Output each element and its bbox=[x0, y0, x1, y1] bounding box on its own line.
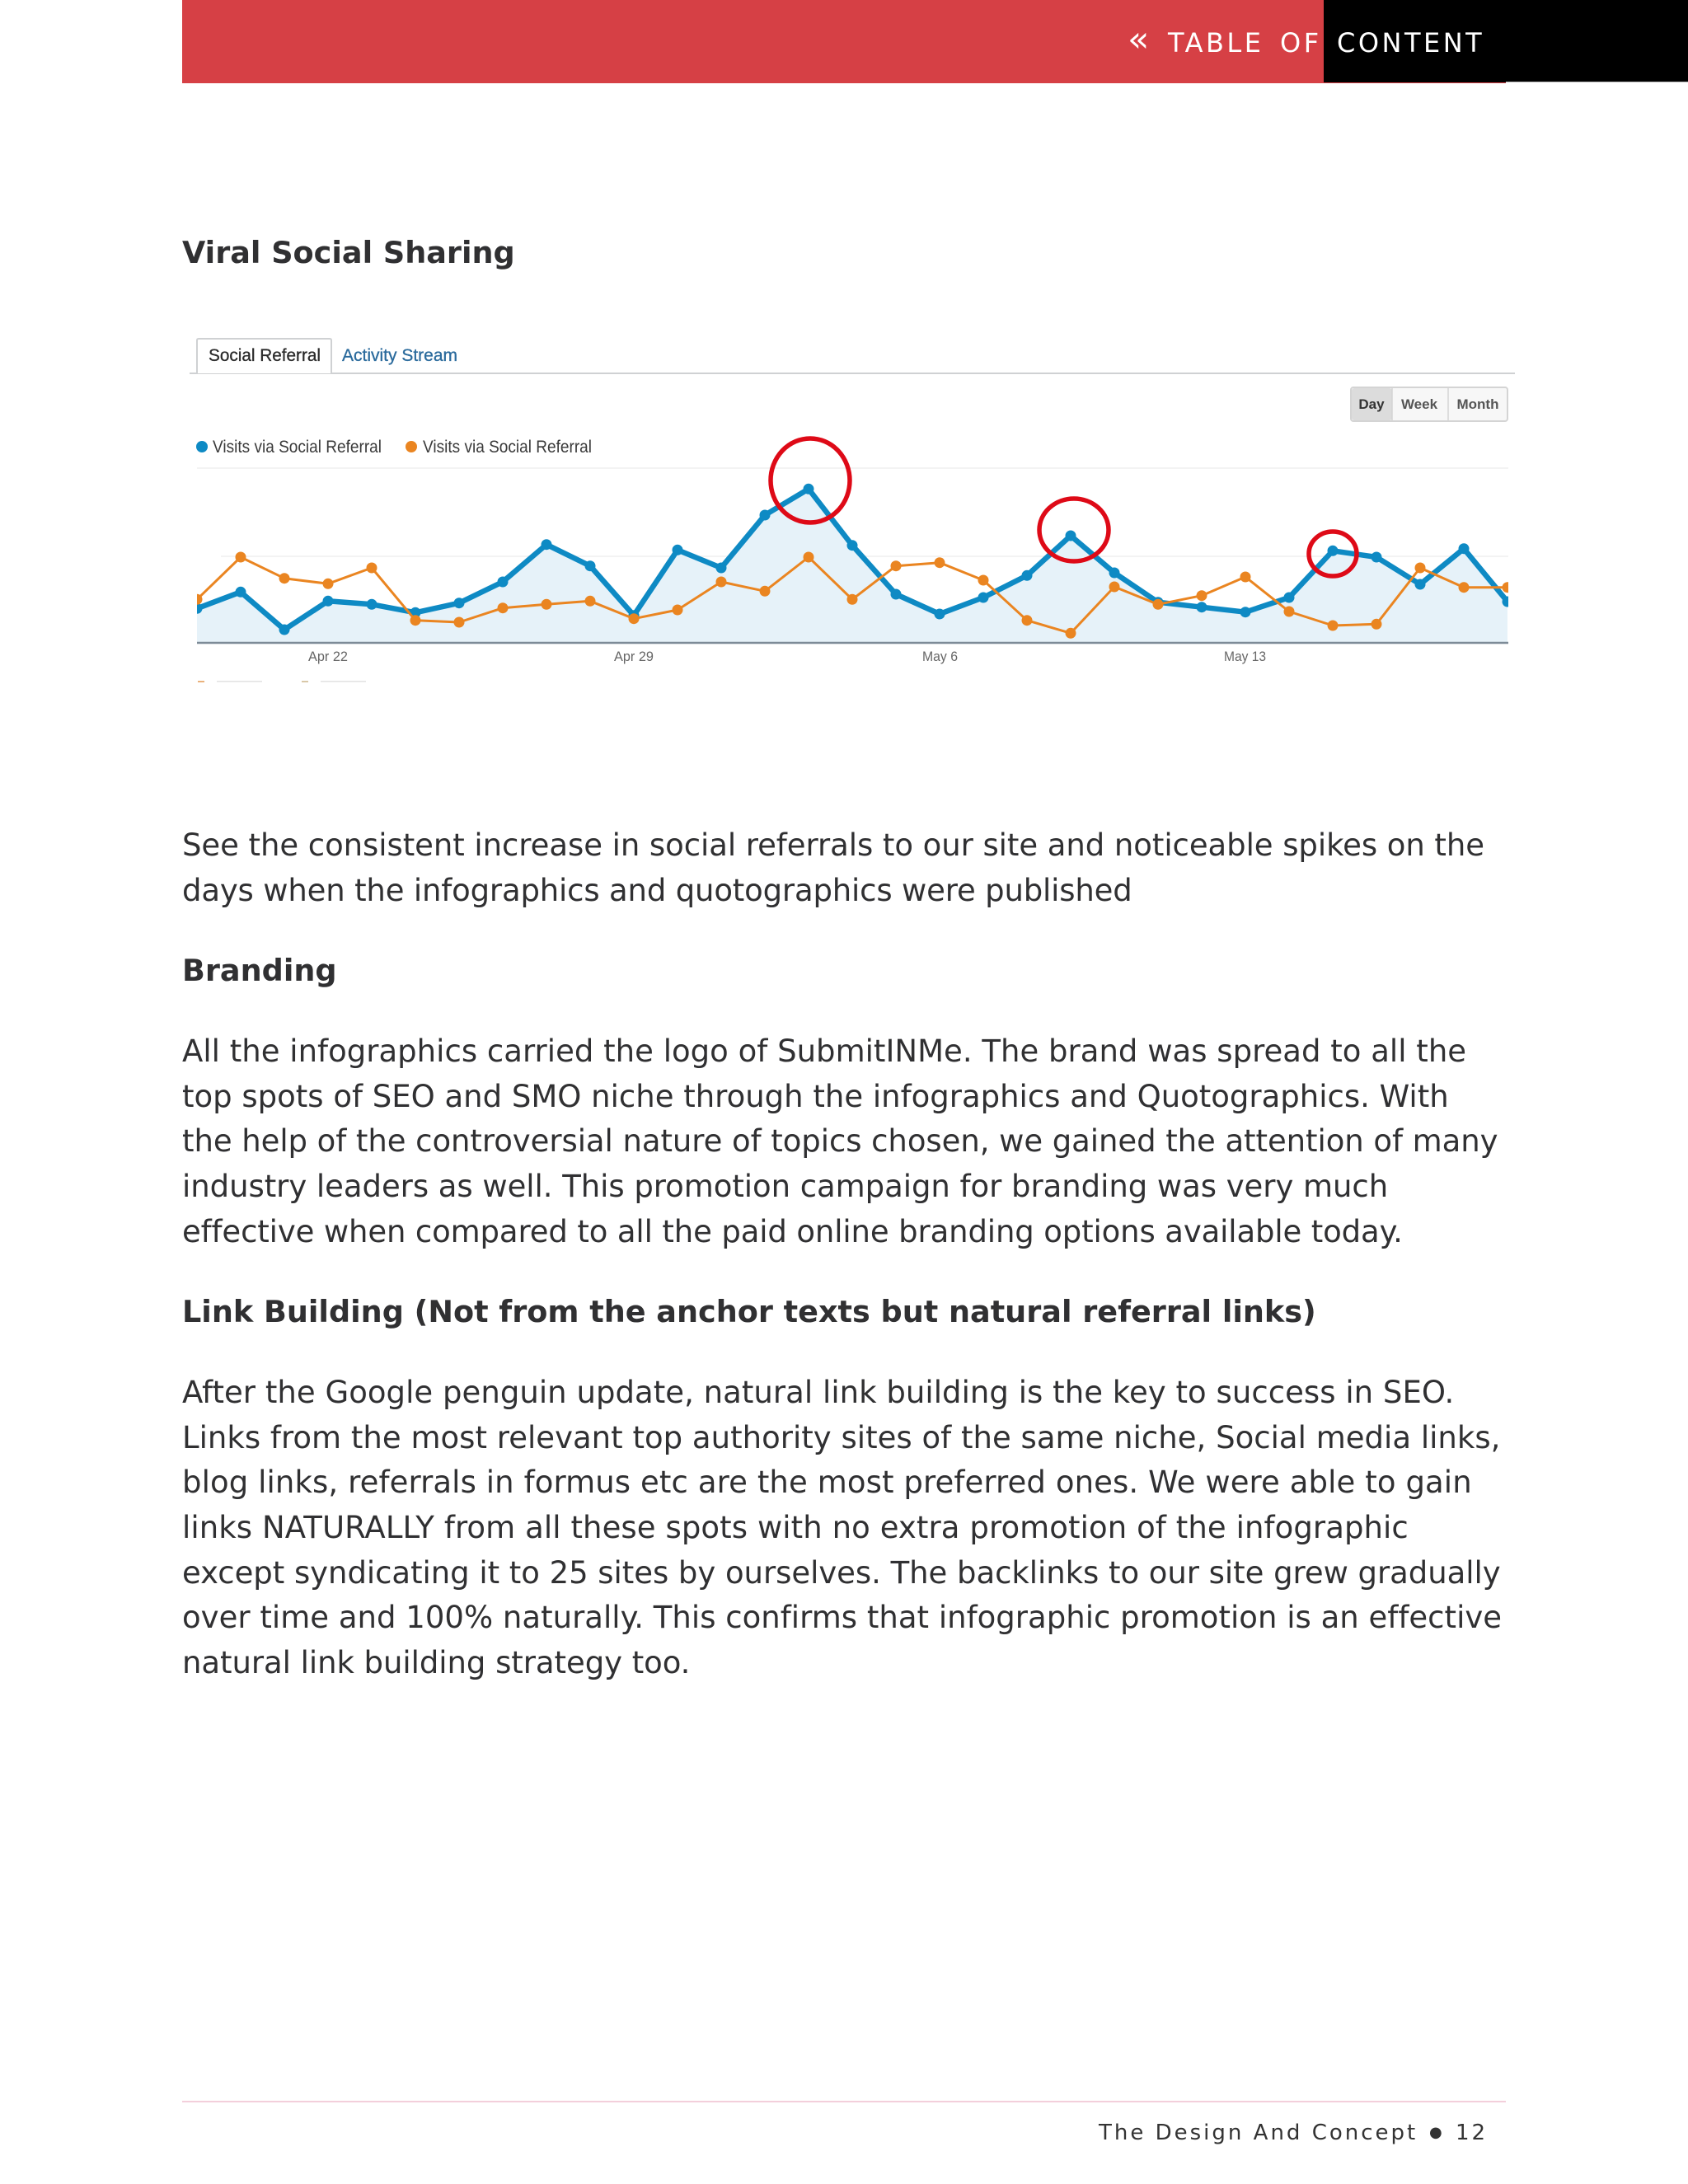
paragraph: social referrals: days when the infographics and quotographics were published bbox=[182, 873, 1132, 908]
red band bbox=[182, 0, 1506, 83]
series: orange bbox=[191, 552, 1513, 639]
x axis labels: Apr 29 bbox=[614, 649, 654, 664]
x axis labels: May 6 bbox=[922, 649, 958, 664]
gridlines bbox=[197, 468, 1508, 556]
paragraph: branding bbox=[182, 1033, 1498, 1249]
cropped lower legend bbox=[198, 681, 366, 682]
footer rule bbox=[182, 2101, 1506, 2102]
range buttons bbox=[1351, 387, 1507, 421]
table of content link: CONTENT bbox=[1337, 27, 1484, 59]
header bar bbox=[182, 0, 1688, 83]
tab: Social Referral bbox=[197, 339, 331, 373]
table of content link: « bbox=[1128, 19, 1152, 60]
black extension bbox=[1506, 0, 1688, 82]
footer text: ● bbox=[1429, 2124, 1442, 2141]
heading: Branding: Branding bbox=[182, 953, 337, 988]
paragraph: social referrals: See the consistent increase in social referrals to our site and noticeable spikes on the bbox=[182, 827, 1484, 863]
table of content link: TABLE bbox=[1168, 27, 1264, 59]
paragraph: link building: over time and 100% naturally. This confirms that infographic promotion is an effective bbox=[182, 1600, 1502, 1635]
tab bar bbox=[190, 339, 1515, 373]
paragraph: link building: blog links, referrals in formus etc are the most preferred ones. We were able to gain bbox=[182, 1465, 1472, 1500]
range buttons: Month bbox=[1457, 396, 1498, 412]
paragraph: link building: except syndicating it to 25 sites by ourselves. The backlinks to our site grew gradually bbox=[182, 1555, 1501, 1591]
black block bbox=[1324, 0, 1688, 82]
range buttons: Week bbox=[1401, 396, 1438, 412]
paragraph: branding: the help of the controversial nature of topics chosen, we gained the attention of many bbox=[182, 1123, 1498, 1159]
footer text: 12 bbox=[1456, 2121, 1488, 2145]
paragraph: link building bbox=[182, 1375, 1502, 1680]
heading: Viral Social Sharing: Viral Social Sharing bbox=[182, 235, 515, 270]
paragraph: link building: After the Google penguin update, natural link building is the key to success in SEO. bbox=[182, 1375, 1454, 1410]
paragraph: link building: links NATURALLY from all these spots with no extra promotion of the infographic bbox=[182, 1510, 1409, 1545]
tab: Activity Stream: Activity Stream bbox=[342, 346, 457, 365]
paragraph: branding: industry leaders as well. This promotion campaign for branding was very much bbox=[182, 1169, 1388, 1204]
paragraph: branding: top spots of SEO and SMO niche through the infographics and Quotographics. With bbox=[182, 1079, 1449, 1114]
red highlight circles bbox=[771, 438, 1357, 576]
table of content link: OF bbox=[1280, 27, 1322, 59]
footer text: The Design And Concept bbox=[1099, 2121, 1418, 2145]
baseline axis bbox=[197, 642, 1508, 644]
legend: Visits via Social Referral bbox=[213, 438, 382, 457]
x axis labels bbox=[308, 649, 1266, 664]
range buttons: Day bbox=[1358, 396, 1385, 412]
paragraph: branding: All the infographics carried the logo of SubmitINMe. The brand was spread to all the bbox=[182, 1033, 1466, 1069]
chart: social referral screenshot bbox=[190, 338, 1515, 682]
area under blue line bbox=[197, 489, 1507, 643]
legend: Visits via Social Referral bbox=[423, 438, 592, 457]
tab: Social Referral: Social Referral bbox=[209, 346, 321, 365]
heading: Link Building: Link Building (Not from the anchor texts but natural referral links) bbox=[182, 1294, 1316, 1329]
paragraph: link building: Links from the most relevant top authority sites of the same niche, Social media links, bbox=[182, 1420, 1500, 1455]
table of content link bbox=[1128, 19, 1484, 60]
series: blue bbox=[191, 484, 1513, 635]
paragraph: social referrals bbox=[182, 827, 1484, 908]
paragraph: branding: effective when compared to all the paid online branding options available today. bbox=[182, 1214, 1403, 1249]
x axis labels: Apr 22 bbox=[308, 649, 348, 664]
x axis labels: May 13 bbox=[1224, 649, 1266, 664]
legend bbox=[196, 438, 592, 457]
paragraph: link building: natural link building strategy too. bbox=[182, 1645, 690, 1680]
